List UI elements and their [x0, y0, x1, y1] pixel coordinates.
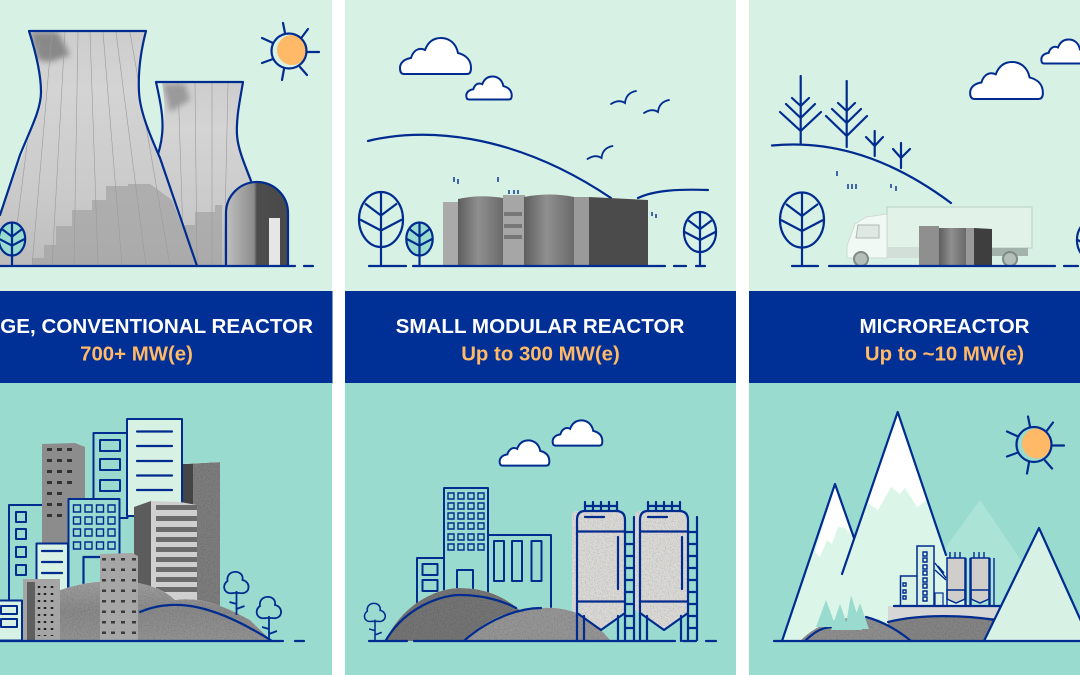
silo left ladder — [625, 517, 634, 640]
ground line — [0, 265, 313, 267]
icon: teal tree — [0, 222, 25, 267]
title: MICROREACTOR — [859, 315, 1030, 338]
icon: tree right cut off — [1076, 226, 1080, 254]
small mountain — [782, 484, 860, 641]
icon: sun — [262, 23, 319, 80]
hills — [800, 616, 995, 641]
icon: cloud left — [500, 440, 549, 466]
concrete platform — [888, 606, 998, 621]
capacity: Up to ~10 MW(e) — [865, 344, 1024, 366]
icon: small cloud — [466, 76, 512, 100]
icon: round tree — [257, 597, 281, 640]
modular reactor building — [443, 194, 648, 266]
ground line — [792, 265, 1078, 267]
ground line — [774, 640, 1080, 642]
cooling tower, rear — [155, 82, 253, 266]
photo striped tower — [134, 501, 197, 600]
hills — [368, 135, 708, 198]
photo tower rear left — [42, 443, 85, 545]
icon: round tree — [364, 603, 385, 640]
panel: city scene — [0, 383, 332, 675]
hills — [385, 588, 611, 641]
outline building left — [8, 504, 42, 600]
panel: large reactor illustration — [0, 0, 333, 291]
panel: microreactor illustration — [749, 0, 1080, 291]
band: microreactor — [749, 291, 1080, 384]
outline building with window grid — [68, 498, 120, 588]
hills — [60, 581, 272, 641]
icon: cloud — [970, 62, 1043, 99]
cooling tower, front — [0, 31, 197, 266]
icon: large cloud — [400, 38, 471, 74]
ground line — [0, 640, 304, 642]
photo building front — [100, 553, 138, 640]
grass ticks — [454, 177, 656, 218]
icon: cloud right — [553, 420, 602, 446]
conifers on hill — [772, 76, 951, 203]
large mountain — [840, 410, 968, 624]
light tower with lines — [127, 419, 182, 516]
small light building with windows — [0, 600, 22, 640]
small light building — [36, 542, 68, 590]
faded mountain — [945, 500, 1022, 609]
panel: mountain scene — [749, 383, 1080, 675]
icon: teal tree — [406, 222, 433, 267]
icon: tree right — [684, 212, 716, 266]
icon: tree left — [359, 192, 403, 266]
ground line — [369, 640, 716, 642]
band: large reactor — [0, 291, 332, 384]
photo building bottom left — [23, 579, 60, 640]
microreactor module — [919, 226, 992, 266]
outline factory — [417, 488, 551, 618]
ground line — [369, 265, 705, 267]
foreground mountain — [984, 528, 1080, 641]
photo tower rear right — [183, 462, 220, 608]
small teal trees — [816, 595, 869, 630]
birds — [588, 91, 669, 159]
silo left — [572, 502, 625, 641]
panel: industrial scene — [345, 383, 736, 675]
outline building with three windows — [94, 433, 128, 518]
miniature plant — [894, 546, 1000, 606]
panel: small modular reactor illustration — [345, 0, 736, 291]
icon: round tree — [224, 572, 249, 615]
icon: sun — [1007, 416, 1064, 474]
delivery truck — [847, 207, 1032, 266]
icon: tree left — [780, 192, 824, 266]
capacity: Up to 300 MW(e) — [461, 344, 620, 366]
silo right ladder — [688, 517, 697, 640]
grass ticks — [837, 171, 896, 191]
silo right — [635, 502, 688, 641]
reactor dome building — [226, 182, 288, 266]
title: SMALL MODULAR REACTOR — [396, 315, 684, 338]
capacity: 700+ MW(e) — [80, 344, 193, 366]
icon: cloud cut off — [1041, 40, 1080, 64]
band: small modular reactor — [345, 291, 736, 384]
